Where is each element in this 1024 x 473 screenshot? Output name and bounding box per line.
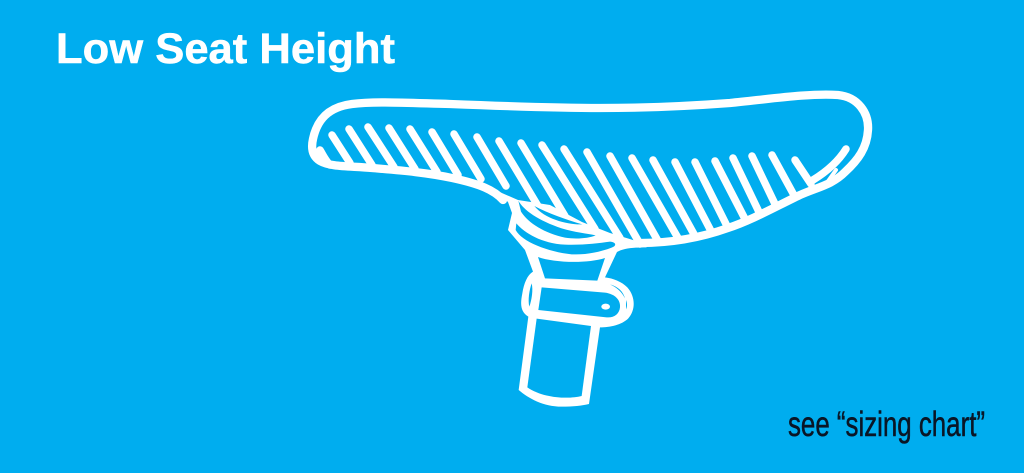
clamp white mass: [495, 190, 647, 407]
neck opening: [538, 257, 605, 281]
lower crescent: [516, 223, 615, 254]
upper crescent: [534, 206, 582, 224]
clamp band: [538, 287, 620, 317]
seat clamp and post: [495, 190, 647, 407]
middle crescent: [518, 201, 596, 238]
clamp slivers: [529, 283, 532, 307]
saddle outline: [312, 95, 868, 243]
saddle hatching: [320, 127, 846, 244]
band hole: [601, 304, 610, 310]
tube: [527, 319, 591, 398]
saddle underside crescents: [516, 201, 615, 254]
icon: bicycle saddle and seat post: [312, 95, 868, 407]
title: Low Seat Height: [56, 25, 395, 73]
